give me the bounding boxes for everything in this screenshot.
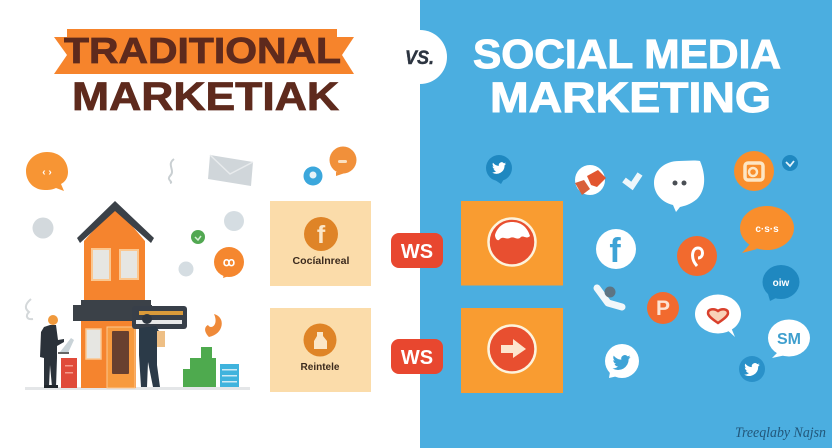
vs badge	[393, 30, 447, 84]
badge: ws top: WS	[401, 241, 433, 263]
door panel	[112, 331, 129, 374]
title line one: TRADITIONAL	[64, 30, 341, 71]
icon: sm bubble: SM	[777, 331, 801, 348]
icon: squiggle	[169, 159, 174, 183]
swirl arrow icon	[205, 314, 222, 337]
badge: ws bottom	[391, 339, 443, 374]
badge: ws bottom: WS	[401, 347, 433, 369]
title: traditional marketing	[54, 29, 354, 119]
icon: white chat bubble	[654, 161, 704, 212]
upper left window	[92, 249, 110, 280]
icon: orange bubble	[330, 146, 356, 176]
icon: blue oiw bubble	[762, 265, 800, 301]
title line two: MARKETING	[490, 74, 771, 122]
icon: f circle: f	[317, 221, 326, 249]
businessman figure	[40, 315, 74, 388]
icon: heart bubble	[695, 294, 741, 337]
icon: pinterest circle: P	[656, 297, 670, 320]
icon: orange speech bubble	[26, 152, 68, 191]
awning	[73, 300, 152, 321]
panel: traditional card one	[270, 201, 371, 286]
lower window	[86, 329, 101, 359]
icon: gray circle left	[32, 218, 54, 238]
signature: Treeqlaby Najsn	[735, 425, 826, 441]
icon: facebook circle: f	[609, 232, 621, 270]
floating icons: social side	[486, 151, 810, 382]
title line one: SOCIAL MEDIA	[473, 31, 781, 77]
white semicircle notch	[393, 30, 447, 84]
icon: small blue bubble	[782, 155, 798, 171]
house upper body	[84, 206, 145, 300]
upper right window	[120, 250, 138, 279]
blue shelf	[220, 364, 239, 387]
blue background panel	[420, 0, 832, 448]
ground line	[25, 387, 250, 390]
icon: arrow circle	[488, 326, 536, 372]
red cabinet	[61, 358, 77, 388]
panel: traditional card two	[270, 308, 371, 392]
title: social media marketing	[473, 31, 781, 122]
icon: check mark	[624, 174, 640, 186]
icon: orange speech bubble: ‹ ›	[42, 167, 52, 178]
icon: facebook circle	[596, 229, 636, 270]
icon: blue location bubble	[304, 166, 322, 186]
illustration: storefront scene	[25, 201, 250, 390]
icon: sm bubble	[768, 320, 810, 358]
badge: ws top	[391, 233, 443, 268]
panel: social card one	[461, 201, 563, 286]
lower body	[81, 320, 136, 388]
icon: green badge	[191, 230, 205, 244]
icon: orange css bubble: c·s·s	[755, 224, 779, 235]
panel: social card two	[461, 308, 563, 393]
icon: envelope	[208, 155, 253, 186]
worker figure	[139, 314, 165, 387]
icon: instagram circle	[734, 151, 774, 191]
roof	[77, 201, 154, 243]
card label: Cocíalnreal	[292, 255, 350, 267]
door	[107, 327, 135, 388]
icon: red glove	[575, 165, 606, 195]
icon: orange chat bubble	[214, 247, 244, 278]
icon: gray circle right	[224, 211, 244, 231]
left squiggle	[26, 299, 33, 319]
floating icons: traditional side	[26, 146, 356, 278]
icon: blue oiw bubble: oiw	[773, 278, 790, 289]
icon: red circle	[488, 218, 536, 266]
vs label: VS.	[405, 48, 434, 69]
icon: orange css bubble	[740, 206, 794, 253]
card label: Reintele	[300, 362, 340, 373]
icon: blue twitter circle	[739, 356, 765, 382]
icon: gray circle small	[178, 262, 194, 276]
icon: bottle circle	[304, 324, 336, 356]
icon: phone handset	[597, 286, 622, 307]
icon: blue twitter bubble	[486, 155, 512, 184]
icon: orange chat bubble: ꝏ	[223, 255, 235, 269]
icon: orange swirl circle	[677, 236, 717, 276]
sign board	[132, 306, 187, 329]
icon: pinterest circle	[647, 292, 679, 324]
icon: white twitter bubble	[605, 344, 639, 378]
title ribbon	[54, 29, 354, 74]
title line two: MARKETIAK	[72, 75, 339, 119]
green bar chart	[183, 347, 216, 387]
